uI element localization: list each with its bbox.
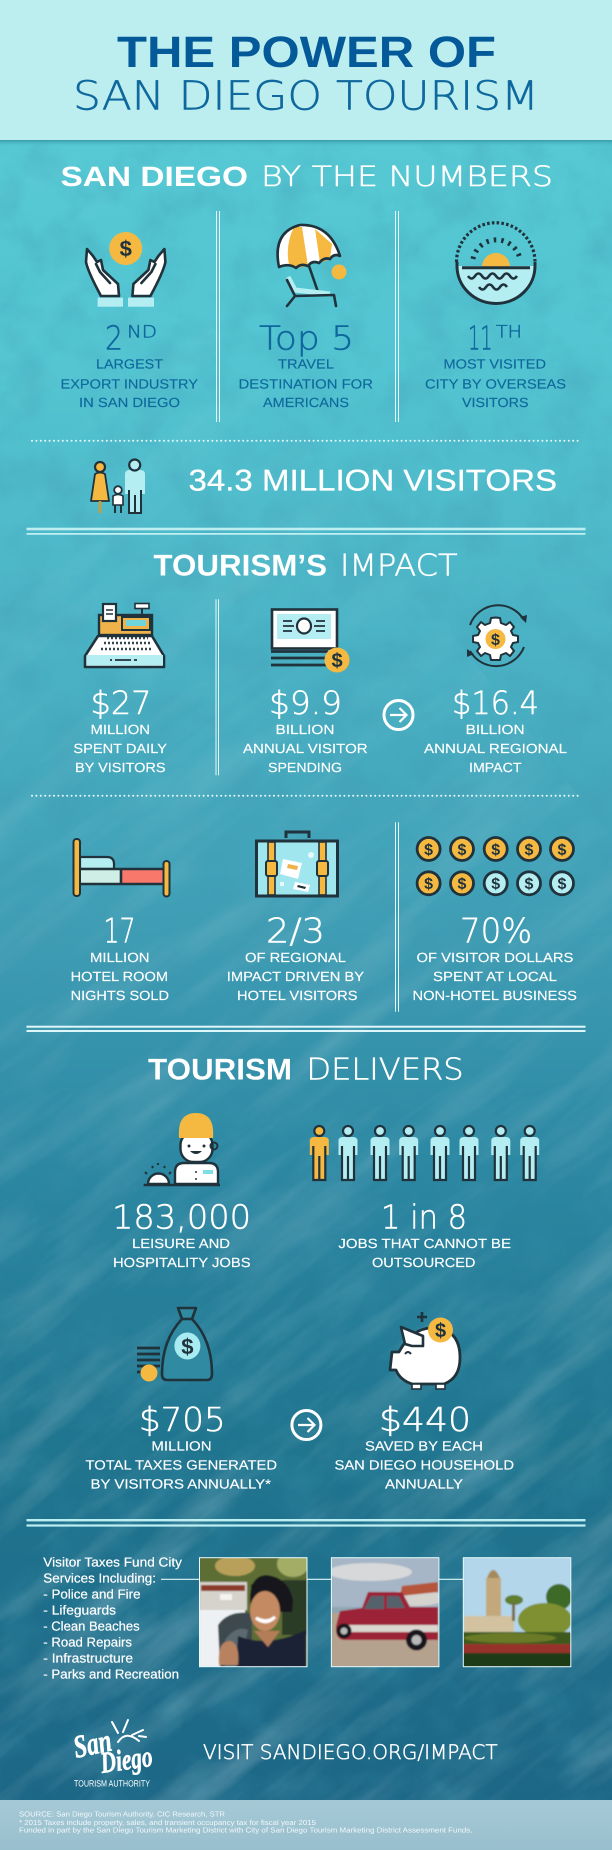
stat: 1 in 8: OUTSOURCED [372, 1255, 475, 1270]
source notes: SOURCE: San Diego Tourism Authority, CIC Research, STR [19, 1810, 225, 1819]
icon: hands holding coin: $ [120, 236, 132, 261]
stat: $27 million: BY VISITORS [75, 760, 166, 775]
stat: $27 million: $27 [90, 684, 152, 722]
icon: bed [74, 839, 170, 896]
stat: 70%: OF VISITOR DOLLARS [416, 950, 574, 965]
icon: cash stack: $ [331, 650, 343, 672]
photo: police officer [199, 1551, 309, 1667]
icon: coin grid: $ [525, 876, 534, 893]
stat: $440 saved: $440 [379, 1400, 471, 1439]
heading: San Diego by the numbers [60, 160, 553, 193]
icon: money bag: $ [181, 1334, 194, 1359]
stat: top 5 [238, 318, 373, 410]
icon: coin grid: $ [558, 842, 567, 859]
call to action: VISIT SANDIEGO.ORG/IMPACT [203, 1740, 498, 1764]
icon: coin grid [417, 838, 574, 895]
header band [0, 0, 612, 147]
stat: $16.4 billion: IMPACT [469, 760, 522, 775]
photo border [200, 1558, 307, 1667]
source notes: * 2015 Taxes include property, sales, and transient occupancy tax for fiscal year 2015 [19, 1818, 316, 1827]
stat: 70%: NON-HOTEL BUSINESS [412, 988, 577, 1003]
stat: 11th: 11 [468, 318, 493, 357]
stat: 2nd [60, 318, 198, 410]
stat: $9.9 billion: ANNUAL VISITOR [243, 741, 368, 756]
stat: 2nd: ND [127, 322, 157, 342]
icon: coin grid: $ [424, 876, 433, 893]
stat: $27 million [73, 684, 167, 775]
stat: 17 million: 17 [104, 912, 136, 952]
stat: top 5: Top 5 [259, 318, 354, 357]
icon: piggy bank: $ [435, 1320, 446, 1342]
stat: 17 million [71, 912, 169, 1003]
icon: family [91, 460, 145, 513]
icon: coin grid: $ [491, 876, 500, 893]
logo: San Diego Tourism Authority: San [70, 1722, 115, 1765]
stat: $9.9 billion: SPENDING [268, 760, 342, 775]
text: visitor taxes fund city services: - Clean Beaches [43, 1619, 140, 1634]
stat: $27 million: MILLION [90, 722, 150, 737]
icon: coin grid: $ [525, 842, 534, 859]
stat: 1 in 8 [338, 1197, 511, 1270]
title: THE POWER OF [117, 28, 496, 77]
stat: $705 million: MILLION [151, 1439, 212, 1454]
icon: coin grid: $ [458, 842, 467, 859]
text: visitor taxes fund city services: - Police and Fire [43, 1587, 140, 1602]
title: SAN DIEGO TOURISM [73, 73, 539, 119]
heading: tourism delivers: TOURISM [148, 1053, 292, 1086]
stat: $9.9 billion [243, 684, 368, 775]
icon: coin grid: $ [424, 842, 433, 859]
icon: cash register [85, 604, 164, 667]
heading: San Diego by the numbers: BY THE NUMBERS [261, 160, 553, 193]
stat: 1 in 8: 1 in 8 [381, 1197, 467, 1236]
stat: $440 saved: ANNUALLY [385, 1477, 463, 1492]
heading: tourism delivers: DELIVERS [306, 1052, 464, 1087]
icon: row of eight workers [310, 1126, 539, 1180]
stat: 183,000: LEISURE AND [132, 1236, 230, 1251]
stat: 2nd: IN SAN DIEGO [79, 395, 180, 410]
stat: 11th: MOST VISITED [444, 357, 546, 372]
stat: $16.4 billion [424, 684, 567, 775]
icon: beach umbrella and chair [278, 225, 346, 306]
logo: San Diego Tourism Authority [70, 1720, 154, 1789]
stat: 183,000 [112, 1197, 251, 1270]
stat: $9.9 billion: BILLION [276, 722, 334, 737]
stat: $440 saved: SAN DIEGO HOUSEHOLD [334, 1458, 514, 1473]
icon: gear and cycle: $ [491, 632, 500, 649]
stat: 2/3: 2/3 [266, 912, 325, 952]
stat: $16.4 billion: BILLION [466, 722, 525, 737]
title [73, 28, 539, 119]
stat: 17 million: MILLION [90, 950, 150, 965]
stat: 2/3 [227, 912, 364, 1003]
footer band [0, 1800, 612, 1850]
stat: 2/3: OF REGIONAL [245, 950, 346, 965]
text: visitor taxes fund city services: - Road Repairs [43, 1635, 132, 1650]
stat: 17 million: HOTEL ROOM [71, 969, 168, 984]
stat: $705 million: $705 [139, 1400, 226, 1439]
stat: $705 million [86, 1400, 277, 1492]
icon: piggy bank [390, 1312, 460, 1389]
stat: $16.4 billion: ANNUAL REGIONAL [424, 741, 567, 756]
text: visitor taxes fund city services: Services Including: [43, 1571, 156, 1586]
icon: cash stack [271, 610, 350, 672]
heading: tourism delivers [148, 1052, 464, 1087]
stat: 2/3: IMPACT DRIVEN BY [227, 969, 364, 984]
heading: tourism's impact [153, 548, 458, 583]
stat: 17 million: NIGHTS SOLD [71, 988, 169, 1003]
stat: 2/3: HOTEL VISITORS [237, 988, 358, 1003]
stat: 11th: VISITORS [462, 395, 529, 410]
text: visitor taxes fund city services: Visitor Taxes Fund City [43, 1555, 183, 1570]
stat: 183,000: 183,000 [112, 1197, 251, 1236]
icon: hands holding coin [86, 232, 165, 307]
photo: lifeguard truck [328, 1557, 445, 1667]
source notes [19, 1810, 472, 1835]
stat: 183,000: HOSPITALITY JOBS [113, 1255, 251, 1270]
stat: 11th [425, 318, 566, 410]
stat: $9.9 billion: $9.9 [269, 684, 342, 722]
stat: 2nd: EXPORT INDUSTRY [60, 376, 198, 391]
stat: 70%: SPENT AT LOCAL [433, 969, 557, 984]
stat: $16.4 billion: $16.4 [452, 684, 539, 722]
stat: 2nd: LARGEST [96, 357, 163, 372]
stat: top 5: TRAVEL [278, 357, 334, 372]
heading: tourism's impact: IMPACT [340, 548, 458, 583]
icon: coin grid: $ [491, 842, 500, 859]
text: visitor taxes fund city services [43, 1555, 183, 1682]
stat: top 5: DESTINATION FOR [238, 376, 373, 391]
stat: 11th: TH [496, 322, 522, 342]
stat: $705 million: BY VISITORS ANNUALLY* [90, 1477, 271, 1492]
text: visitor taxes fund city services: - Parks and Recreation [43, 1667, 179, 1682]
stat: $27 million: SPENT DAILY [73, 741, 167, 756]
arrow [384, 700, 413, 730]
logo: San Diego Tourism Authority: Diego [98, 1740, 154, 1780]
photo: Balboa Park tower [463, 1557, 572, 1667]
stat: $440 saved [334, 1400, 514, 1492]
stat: 70% [412, 912, 577, 1003]
stat: 70%: 70% [460, 912, 532, 952]
icon: suitcase [256, 832, 338, 896]
logo: San Diego Tourism Authority: TOURISM AUTHORITY [74, 1779, 150, 1789]
34.3 million visitors: 34.3 MILLION VISITORS [188, 465, 557, 498]
icon: hotel worker and bell [144, 1113, 220, 1185]
stat: 2nd: 2 [105, 318, 123, 357]
stat: top 5: AMERICANS [263, 395, 349, 410]
text: visitor taxes fund city services: - Lifeguards [43, 1603, 117, 1618]
icon: coin grid: $ [558, 876, 567, 893]
heading: San Diego by the numbers: SAN DIEGO [60, 161, 248, 192]
photo border [331, 1558, 439, 1667]
stat: 1 in 8: JOBS THAT CANNOT BE [338, 1236, 511, 1251]
icon: coin grid: $ [458, 876, 467, 893]
photo border [463, 1558, 571, 1667]
icon: money bag [137, 1308, 212, 1382]
arrow [292, 1410, 321, 1440]
source notes: Funded in part by the San Diego Tourism Marketing District with City of San Diego Tourism Marketing District Assessment Funds. [19, 1826, 472, 1835]
icon: gear and cycle [467, 605, 527, 666]
stat: $705 million: TOTAL TAXES GENERATED [86, 1458, 277, 1473]
stat: $440 saved: SAVED BY EACH [365, 1439, 483, 1454]
icon: sun over waves [456, 223, 535, 303]
heading: tourism's impact: TOURISM’S [153, 549, 327, 582]
stat: 11th: CITY BY OVERSEAS [425, 376, 566, 391]
text: visitor taxes fund city services: - Infrastructure [43, 1651, 133, 1666]
